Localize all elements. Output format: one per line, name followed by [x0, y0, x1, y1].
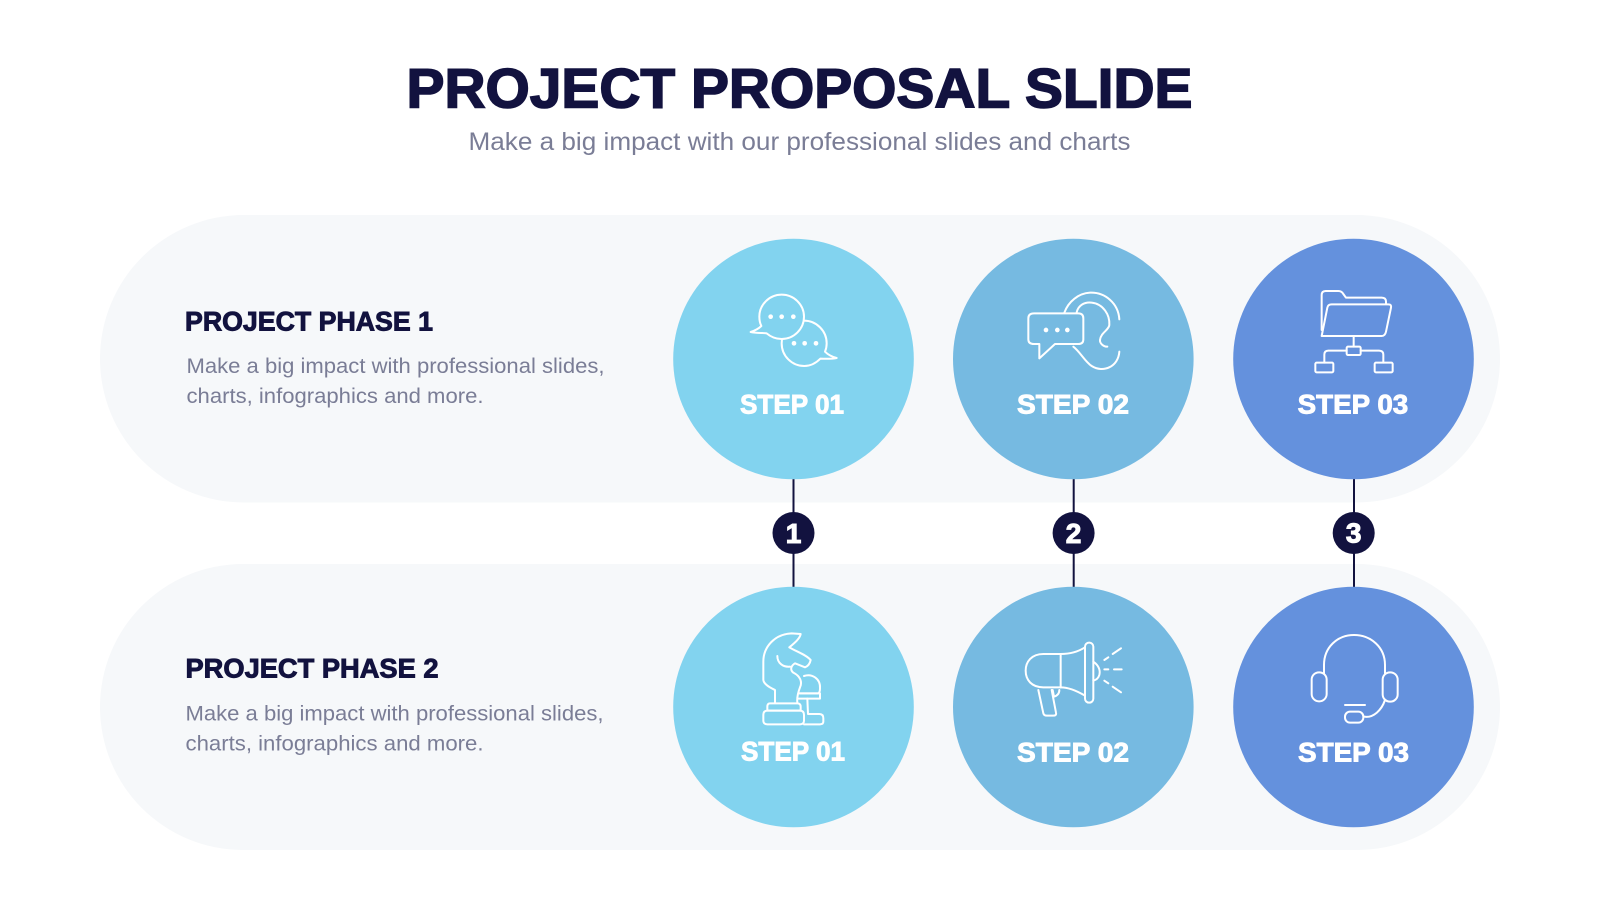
- label: step 03: STEP 03: [1298, 738, 1409, 768]
- text block: phase 2 description: Make a big impact with professional slides,: [186, 702, 604, 726]
- icon: chess pieces: [763, 633, 823, 724]
- heading: project phase 1: PROJECT PHASE 1: [185, 306, 433, 336]
- text block: phase 2 description: [186, 702, 604, 756]
- icon: chat bubbles: [751, 295, 837, 366]
- connector 1 with number badge: [772, 475, 814, 591]
- icon: headset: [1312, 635, 1398, 723]
- phase 1 step 02 circle: [953, 239, 1194, 479]
- label: step 01: STEP 01: [740, 390, 844, 420]
- icon: folder network: [1315, 291, 1393, 372]
- label: step 02: STEP 02: [1017, 738, 1129, 768]
- panel: project phase 2 band: [100, 564, 1500, 850]
- icon: speech bubble and ear: [1028, 293, 1119, 369]
- phase 2 step 02 circle: [953, 587, 1194, 827]
- phase 1 step 01 circle: [673, 239, 914, 479]
- phase 2 step 03 circle: [1233, 587, 1474, 827]
- heading: project phase 2: PROJECT PHASE 2: [186, 654, 438, 684]
- text block: phase 1 description: [186, 355, 604, 408]
- label: step 01: STEP 01: [741, 736, 845, 766]
- text block: phase 1 description: Make a big impact with professional slides,: [186, 355, 604, 378]
- icon: megaphone: [1026, 643, 1122, 716]
- phase 1 step 03 circle: [1233, 239, 1474, 479]
- label: step 03: STEP 03: [1298, 390, 1408, 420]
- connector 2 with number badge: 2: [1066, 518, 1081, 549]
- panel: project phase 1 band: [100, 215, 1500, 502]
- text block: phase 1 description: charts, infographics and more.: [186, 385, 484, 408]
- connector 3 with number badge: 3: [1346, 518, 1361, 548]
- connector 2 with number badge: [1053, 475, 1095, 591]
- subtitle: Make a big impact with our professional slides and charts: [468, 128, 1130, 156]
- connector 3 with number badge: [1333, 475, 1375, 591]
- label: step 02: STEP 02: [1017, 390, 1129, 420]
- phase 2 step 01 circle: [673, 587, 914, 827]
- text block: phase 2 description: charts, infographics and more.: [186, 732, 484, 756]
- title: PROJECT PROPOSAL SLIDE: [406, 56, 1192, 120]
- connector 1 with number badge: 1: [786, 518, 801, 549]
